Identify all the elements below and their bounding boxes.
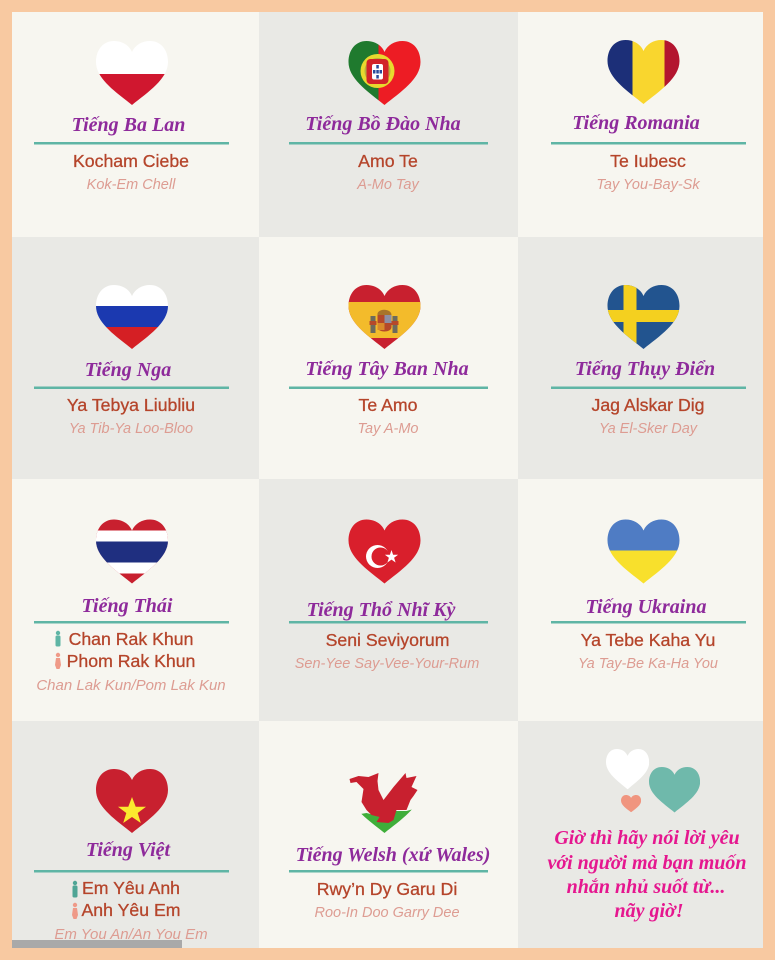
heading: Romania: Tiếng Romania (572, 112, 700, 134)
phrase: Amo Te (358, 151, 418, 171)
icon: female figure (72, 903, 78, 919)
heading: Turkey: Tiếng Thổ Nhĩ Kỳ (307, 599, 455, 621)
heading: Thailand: Tiếng Thái (82, 595, 173, 617)
icon: Thailand flag heart (96, 520, 168, 584)
panel: Portugal (259, 12, 518, 237)
pronunciation: Sen-Yee Say-Vee-Your-Rum (295, 656, 479, 672)
phrase: Te Amo (358, 395, 418, 415)
phrase: male: Chan Rak Khun (69, 629, 193, 649)
heading: Ukraine: Tiếng Ukraina (586, 596, 706, 618)
panel: Ukraine (518, 479, 763, 721)
icon: Russia flag heart (96, 285, 168, 349)
icon: Portugal flag heart (348, 41, 420, 105)
closing text: nhắn nhủ suốt từ... (567, 876, 725, 898)
heading: Vietnam: Tiếng Việt (86, 839, 172, 861)
phrase: female: Phom Rak Khun (67, 651, 195, 671)
panel: Romania (518, 12, 763, 237)
icon: Spain flag heart (348, 285, 420, 349)
icon: teal heart (649, 767, 700, 812)
icon: Ukraine flag heart (608, 520, 680, 584)
phrase: Rwy’n Dy Garu Di (317, 879, 457, 899)
icon: male figure (72, 881, 78, 898)
heading: Portugal: Tiếng Bồ Đào Nha (305, 113, 461, 135)
icon: Poland flag heart (96, 41, 168, 105)
closing text: với người mà bạn muốn (547, 852, 747, 874)
panel: Wales (259, 721, 518, 948)
phrase: male: Em Yêu Anh (82, 878, 180, 898)
closing text (547, 827, 747, 922)
icon: salmon heart (621, 795, 641, 812)
panel: Vietnam (12, 721, 259, 948)
icon: male figure (56, 631, 60, 646)
icon: Wales flag heart (350, 773, 418, 833)
closing text: nãy giờ! (614, 900, 684, 922)
icon: white heart (606, 749, 649, 789)
heading: Spain: Tiếng Tây Ban Nha (305, 358, 469, 380)
panel: Poland (12, 12, 259, 237)
phrase: Te Iubesc (610, 151, 686, 171)
pronunciation: Tay You-Bay-Sk (596, 177, 700, 193)
heading: Wales: Tiếng Welsh (xứ Wales) (296, 844, 490, 866)
panel: Thailand (12, 479, 259, 721)
phrase: Ya Tebya Liubliu (67, 395, 195, 415)
panel: closing message (518, 721, 763, 948)
pronunciation: Tay A-Mo (358, 421, 418, 437)
pronunciation: Roo-In Doo Garry Dee (314, 905, 460, 921)
closing text: Giờ thì hãy nói lời yêu (554, 827, 740, 849)
phrase: Kocham Ciebe (73, 151, 189, 171)
heading: Poland: Tiếng Ba Lan (72, 114, 185, 136)
pronunciation: A-Mo Tay (356, 177, 420, 193)
pronunciation: Kok-Em Chell (87, 177, 176, 193)
pronunciation: Ya El-Sker Day (599, 421, 698, 437)
pronunciation: Ya Tay-Be Ka-Ha You (578, 656, 718, 672)
phrase: Ya Tebe Kaha Yu (581, 630, 715, 650)
icon: female figure (55, 653, 61, 669)
phrase: Jag Alskar Dig (591, 395, 705, 415)
panel: Russia (12, 237, 259, 479)
icon: Romania flag heart (608, 40, 680, 104)
pronunciation: Ya Tib-Ya Loo-Bloo (69, 421, 193, 437)
heading: Russia: Tiếng Nga (85, 359, 171, 381)
icon: Vietnam flag heart (96, 769, 168, 833)
icon: Sweden flag heart (608, 285, 680, 349)
panel: Spain (259, 237, 518, 479)
pronunciation: Em You An/An You Em (54, 926, 208, 943)
panel: Turkey (259, 479, 518, 721)
pronunciation: Chan Lak Kun/Pom Lak Kun (36, 677, 226, 694)
panel: Sweden (518, 237, 763, 479)
phrase: female: Anh Yêu Em (82, 900, 180, 920)
phrase: Seni Seviyorum (326, 630, 449, 650)
heading: Sweden: Tiếng Thụy Điển (575, 358, 715, 380)
icon: Turkey flag heart (348, 520, 420, 584)
